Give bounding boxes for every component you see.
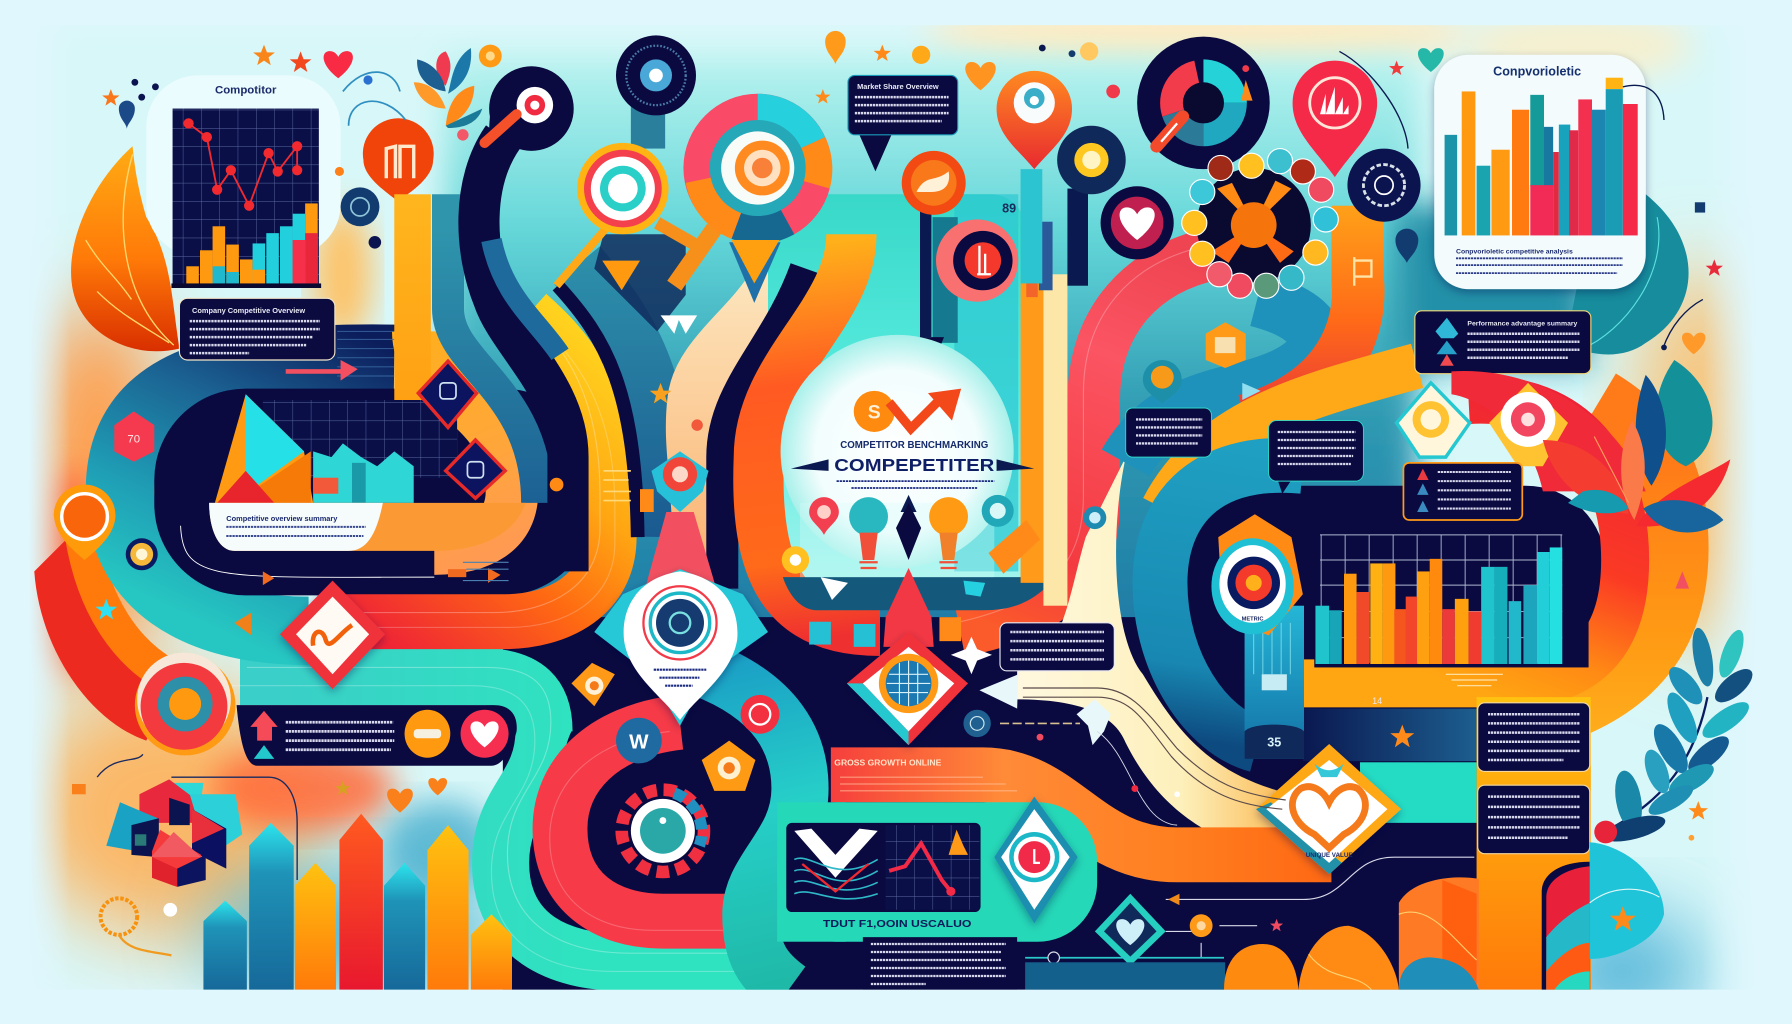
icon: isometric cubes bbox=[106, 779, 242, 887]
icon: orange down triangle with blue tip bbox=[729, 240, 781, 303]
text block: upper right with arrows: Performance advantage summary bbox=[1467, 321, 1578, 328]
lines: cream stripes bbox=[1023, 688, 1286, 809]
panel: dark chart interior bbox=[1177, 486, 1606, 680]
text block: bottom centre bbox=[863, 937, 1017, 990]
icon: large diamond heart badge: UNIQUE VALUE bbox=[1306, 852, 1353, 859]
column: orange from pin bbox=[394, 194, 446, 455]
text block: upper right with arrows bbox=[1415, 311, 1591, 374]
icon: orange star on navy bbox=[1390, 725, 1414, 747]
icon: small navy coin bbox=[963, 710, 991, 737]
arrow: red pointer bbox=[286, 360, 358, 381]
card: layered colours bottom right bbox=[1542, 862, 1590, 990]
left bubble panel bbox=[146, 75, 341, 256]
ribbon: teal ring right bbox=[1160, 465, 1303, 745]
icon: small connectors lower left bbox=[181, 526, 509, 585]
dark fan behind magnifier bbox=[594, 234, 686, 331]
chart: shapes in left loop bbox=[215, 394, 457, 503]
label: dark top callout bbox=[848, 75, 958, 171]
text block: top left: Company Competitive Overview bbox=[192, 306, 305, 315]
card: right bar chart: Conpvorioletic bbox=[1493, 64, 1581, 78]
leaves: bottom orange lumps bbox=[1224, 877, 1479, 990]
icon: dark gear disc top bbox=[616, 35, 696, 149]
icon: orange sun scribble bbox=[101, 898, 177, 955]
red-orange swirl right bbox=[1451, 371, 1646, 491]
column: orange from pin: 30 bbox=[409, 432, 421, 443]
ribbon: orange lower: GROSS GROWTH ONLINE bbox=[834, 758, 942, 768]
icon: orange down triangle bbox=[602, 261, 640, 290]
line and bar chart: top left bbox=[171, 109, 321, 288]
icon: orange badge map bbox=[902, 151, 966, 215]
bowl inner dark bbox=[783, 577, 1057, 610]
icon: red right pin bbox=[1293, 61, 1377, 177]
text block: top left bbox=[179, 298, 335, 360]
strip: orange and cream column bbox=[1021, 274, 1067, 606]
icon: dark pattern disc bbox=[1347, 149, 1421, 222]
icon: blue W circle bbox=[616, 718, 662, 763]
ribbon: cyan lower bbox=[703, 669, 800, 990]
ribbon: blue centre-right bbox=[1126, 299, 1316, 463]
icons: decorative top right bbox=[815, 31, 1723, 276]
icon: right badge hex bbox=[1489, 383, 1568, 466]
text block: callout with tail bbox=[1269, 421, 1363, 494]
teal band beside centre bbox=[954, 194, 1018, 571]
red outer crescent bbox=[34, 537, 171, 741]
ribbon: blue stripes centre bbox=[577, 265, 665, 537]
strips: small code text left of pin bbox=[550, 419, 703, 512]
icon: small lower-left hearts bbox=[72, 778, 447, 813]
left edge fade bbox=[0, 0, 71, 1024]
icon: red pin with chart bbox=[363, 118, 434, 201]
icon: heart diamond small bbox=[1095, 894, 1166, 966]
connector: lower-left curve bbox=[97, 754, 297, 880]
title: COMPEPETITER bbox=[834, 455, 995, 475]
ribbon: bowl orange-red bbox=[758, 234, 880, 631]
dots: curve below star bbox=[1037, 731, 1180, 825]
panel: central dome bbox=[781, 335, 1014, 577]
ribbon: red lower bbox=[550, 722, 749, 930]
dark inner left ribbon bbox=[562, 731, 731, 903]
bar chart: pointed columns bbox=[203, 814, 512, 990]
icon: left badge hex bbox=[1397, 383, 1470, 457]
icon: red W coin bbox=[741, 695, 779, 734]
icon: star small centre bbox=[650, 383, 671, 403]
panel: mint strip right bbox=[1360, 762, 1477, 823]
ribbon: blue strand bbox=[448, 194, 537, 503]
icon: navy arrow down bbox=[910, 160, 958, 383]
ribbon: yellow band bbox=[1163, 366, 1417, 509]
leaf: teal round with star bbox=[1590, 842, 1664, 959]
connector: right card curve bbox=[1623, 85, 1664, 120]
icon: gold shield bbox=[702, 741, 755, 791]
icon: small ring badge bbox=[126, 538, 158, 570]
text block: small centre right bbox=[1126, 408, 1211, 457]
panel: dark ring interior bbox=[154, 389, 594, 595]
icon: orange location pin bbox=[54, 485, 115, 560]
icon: red kite arrow bbox=[883, 568, 934, 647]
icon: red shield number: 70 bbox=[127, 433, 140, 445]
ribbon: mint lower bbox=[231, 667, 784, 971]
panel: white text label: Competitive overview summary bbox=[226, 514, 338, 523]
orange column bottom right bbox=[1477, 697, 1591, 990]
right edge fade bbox=[1703, 0, 1792, 1024]
icon: orange arrow chevron bbox=[234, 613, 251, 635]
connector: bottom lines bbox=[1025, 857, 1474, 963]
icon: cyan star bbox=[95, 599, 117, 619]
ribbon: cream bbox=[692, 234, 789, 571]
icon: radial wheel bbox=[1182, 149, 1338, 298]
ribbon: cream sweep lower bbox=[1017, 457, 1297, 855]
icon: magnifier target bbox=[577, 143, 669, 234]
icon: blue W circle: W bbox=[629, 731, 649, 754]
icon: white triangle arrow bbox=[979, 674, 1018, 709]
icon: teal pin bbox=[1143, 360, 1182, 403]
icon: bulbs row bbox=[809, 495, 1014, 568]
icons: teal card pair bbox=[809, 581, 985, 647]
orange and blue strip chart bbox=[1026, 222, 1053, 297]
bar badge: right chart badge column bbox=[1245, 606, 1304, 759]
connector lines: magnifier handle bbox=[557, 223, 714, 286]
icon: arrow chevron bbox=[1242, 383, 1261, 400]
panel: dark bar with icons bbox=[237, 705, 517, 766]
icons: decorative top left bbox=[102, 45, 502, 176]
panel: white text label bbox=[209, 503, 526, 551]
text block: orange outlined bbox=[1403, 463, 1522, 520]
icon: target wheel bbox=[683, 94, 832, 244]
icon: orange slanted tag bbox=[989, 520, 1040, 574]
navy backdrop bbox=[503, 617, 1480, 990]
connector: pin curve top bbox=[1339, 51, 1408, 149]
leaf branch: bottom right bbox=[1594, 626, 1758, 847]
bar chart: dark chart right bbox=[1314, 533, 1589, 667]
text: orange band caption bbox=[1446, 674, 1503, 686]
icon: orange star badge bbox=[571, 663, 615, 706]
dashes: small line under star bbox=[1000, 722, 1080, 724]
ribbon: navy S curve bbox=[479, 137, 568, 571]
icon: diamond badge lower bbox=[994, 797, 1078, 923]
icon: top leaf sprig bbox=[414, 48, 482, 128]
ribbon: blue stripe bbox=[491, 240, 560, 354]
icon: yellow coin bbox=[782, 506, 1106, 574]
card: right bar chart: Conpvorioletic competitive analysis bbox=[1456, 249, 1573, 256]
icon: small gold flag bbox=[1354, 257, 1371, 286]
text block: right upper bbox=[1478, 703, 1590, 771]
icon: navy diamond lower bbox=[446, 440, 505, 498]
icon: target disc bbox=[135, 653, 235, 755]
icon: red top pin bbox=[997, 71, 1072, 283]
icon: red diamond with zigzag bbox=[280, 581, 385, 689]
icon: small number label: 89 bbox=[1002, 202, 1016, 216]
bar badge: right chart badge column: 35 bbox=[1267, 735, 1281, 749]
ribbon: red ring right bbox=[1304, 400, 1625, 683]
text block: right lower bbox=[1478, 785, 1590, 854]
orange inner crescent bbox=[82, 537, 166, 674]
panel: navy band right bbox=[1303, 709, 1480, 761]
panel: mint panel lower bbox=[777, 802, 1097, 942]
ribbon: left teal ring bbox=[120, 359, 394, 631]
icon: navy diamond upper bbox=[418, 361, 477, 427]
title bbox=[791, 440, 1034, 488]
icon: red shield number bbox=[114, 411, 154, 462]
navy edge beside yellow bbox=[558, 286, 638, 537]
icon: white triangles small bbox=[661, 315, 697, 334]
title: COMPETITOR BENCHMARKING bbox=[840, 440, 988, 451]
centre mint backdrop bbox=[768, 194, 1025, 594]
icon: gauge disc bbox=[1137, 37, 1270, 169]
label: dark top callout: Market Share Overview bbox=[857, 82, 939, 91]
icon: gear bbox=[622, 790, 704, 872]
icon: orange small pin bbox=[1168, 894, 1283, 937]
icon: navy disc gold bbox=[1057, 126, 1126, 286]
icon: large pin badge bbox=[594, 569, 768, 726]
ribbon: right orange column bbox=[1246, 206, 1358, 421]
icon: white star pointer bbox=[1077, 699, 1111, 745]
panel: blue footer band bbox=[1025, 962, 1225, 990]
icon: white four-point star bbox=[951, 637, 992, 674]
icon: target badge on chart bbox=[1211, 514, 1303, 635]
icon: dark dots bbox=[131, 79, 381, 249]
icon: hexagon pin middle bbox=[651, 451, 709, 512]
icon: centre diamond badge bbox=[847, 632, 968, 745]
text block: small centre bbox=[1000, 623, 1114, 671]
icon: black pin with knob bbox=[485, 66, 574, 151]
text label: mint panel caption: TDUT F1,OOIN USCALUO bbox=[823, 919, 971, 930]
icon: coral ring disc bbox=[936, 219, 1018, 302]
icon: white paper plane bbox=[821, 577, 848, 600]
centre pin tail: red band bbox=[631, 512, 731, 640]
navy band lines bbox=[337, 331, 394, 376]
icon: large diamond heart badge bbox=[1256, 744, 1401, 874]
text: number 14: 14 bbox=[1372, 696, 1382, 706]
ribbon: large coral bbox=[950, 247, 1214, 631]
icons: decorative right column bbox=[1675, 571, 1708, 841]
icon: gold hex badge bbox=[1206, 322, 1246, 368]
icon: growth arrow: S bbox=[868, 401, 881, 423]
icon: target badge on chart: METRIC bbox=[1242, 617, 1264, 623]
ribbon: yellow to red bbox=[334, 305, 615, 627]
leaf cluster: red and teal bbox=[1543, 360, 1730, 532]
leaf: right teal bbox=[1566, 194, 1689, 354]
page footer band bbox=[0, 990, 1792, 1024]
ribbon: orange lower bbox=[831, 758, 1331, 855]
icon: dark small disc bbox=[341, 187, 379, 226]
navy strand left of bowl bbox=[722, 269, 806, 589]
ribbon: orange outer right bbox=[1480, 400, 1678, 731]
connector: right arrow curve bbox=[1661, 299, 1705, 354]
chart: dark chevron graphic bbox=[786, 823, 981, 912]
icon: growth arrow bbox=[854, 389, 961, 432]
leaf: left orange bbox=[71, 146, 179, 351]
card: right bar chart bbox=[1434, 55, 1646, 289]
icon: heart disc bbox=[1101, 186, 1174, 259]
ribbon: peach to orange bbox=[418, 331, 512, 549]
left bubble panel: Compotitor bbox=[215, 85, 277, 97]
